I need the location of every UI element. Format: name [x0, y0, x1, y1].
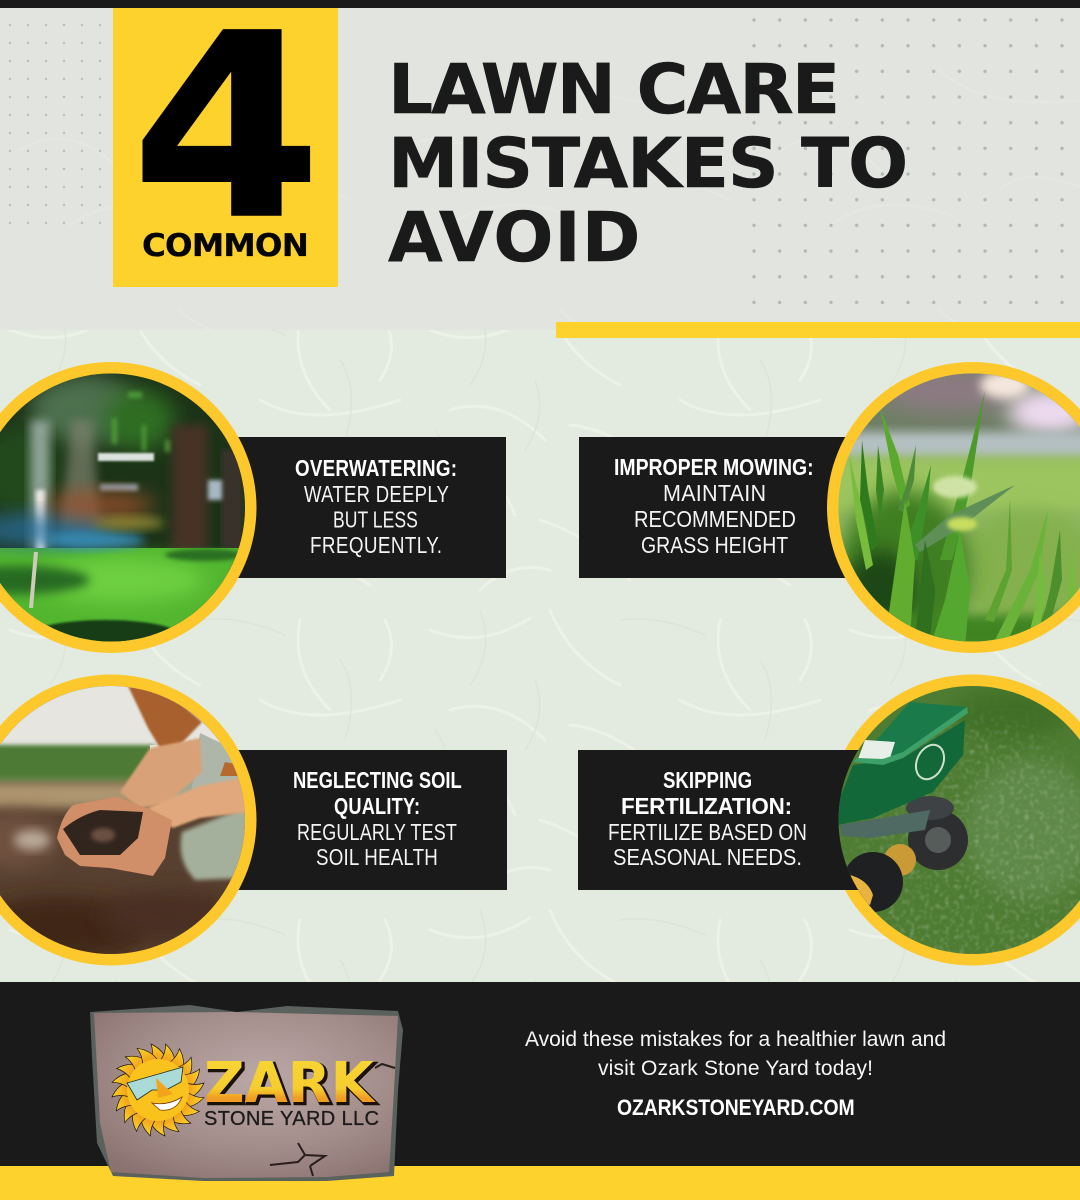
title: AVOID	[388, 198, 640, 278]
background: header band	[0, 0, 1080, 330]
stone plate face	[94, 1012, 398, 1178]
card: overwatering: OVERWATERING:	[295, 456, 457, 481]
far wheel	[908, 810, 968, 870]
photo: grass blades	[820, 362, 1080, 653]
photo: sprinkler with rainbow	[0, 362, 260, 653]
dot pattern left	[0, 16, 108, 232]
yellow number panel	[113, 0, 338, 287]
card: neglecting soil quality	[200, 750, 507, 890]
card: overwatering: WATER DEEPLY	[304, 482, 449, 508]
card: overwatering: BUT LESS	[333, 507, 418, 533]
top dark strip	[0, 0, 1080, 8]
card: skipping fertilization	[578, 750, 860, 890]
logo wordmark STONE YARD LLC: STONE YARD LLC	[204, 1108, 379, 1130]
yellow bottom strip	[0, 1166, 1080, 1200]
footer band	[0, 982, 1080, 1166]
card: skipping fertilization: FERTILIZATION:	[621, 793, 792, 819]
dot pattern right	[745, 10, 1070, 310]
logo wordmark shadow: ZARK	[206, 1053, 379, 1118]
photo: fertilizer spreader on lawn	[838, 686, 1080, 954]
photo: hands holding soil	[0, 674, 260, 970]
footer call to action: visit Ozark Stone Yard today!	[598, 1057, 873, 1080]
background: grass field	[0, 330, 1080, 982]
title	[388, 50, 908, 278]
logo: Ozark Stone Yard LLC	[90, 1005, 403, 1181]
card: overwatering: FREQUENTLY.	[310, 533, 442, 558]
hopper body	[838, 720, 965, 825]
card: neglecting soil quality: NEGLECTING SOIL	[293, 768, 462, 794]
logo wordmark ZARK: ZARK	[204, 1051, 377, 1116]
card: overwatering	[200, 437, 506, 578]
card: neglecting soil quality: SOIL HEALTH	[316, 845, 438, 870]
card: neglecting soil quality: QUALITY:	[334, 794, 420, 820]
title: LAWN CARE	[388, 50, 840, 130]
ring: fertilizer photo frame	[827, 674, 1080, 966]
card: improper mowing: RECOMMENDED	[634, 506, 796, 532]
icon: sun with sunglasses	[111, 1043, 205, 1137]
crack lines	[270, 1064, 395, 1176]
stone plate back	[90, 1005, 403, 1181]
near wheel	[843, 852, 903, 912]
title: MISTAKES TO	[388, 124, 908, 204]
spreader frame	[840, 810, 930, 838]
card: neglecting soil quality: REGULARLY TEST	[297, 820, 457, 846]
card: skipping fertilization: FERTILIZE BASED ON	[608, 820, 807, 845]
card: improper mowing: IMPROPER MOWING:	[614, 454, 814, 480]
card: improper mowing: GRASS HEIGHT	[641, 532, 788, 558]
word COMMON: COMMON	[142, 226, 309, 264]
card: skipping fertilization: SEASONAL NEEDS.	[613, 844, 802, 870]
yellow divider bar	[556, 322, 1080, 338]
card: improper mowing: MAINTAIN	[663, 480, 766, 506]
hopper rim	[853, 707, 968, 765]
card: improper mowing	[579, 437, 879, 578]
card: skipping fertilization: SKIPPING	[663, 768, 752, 793]
footer call to action	[525, 1028, 946, 1120]
footer call to action: Avoid these mistakes for a healthier lawn and	[525, 1028, 946, 1051]
website: OZARKSTONEYARD.COM	[617, 1096, 855, 1120]
hopper interior	[876, 702, 966, 759]
